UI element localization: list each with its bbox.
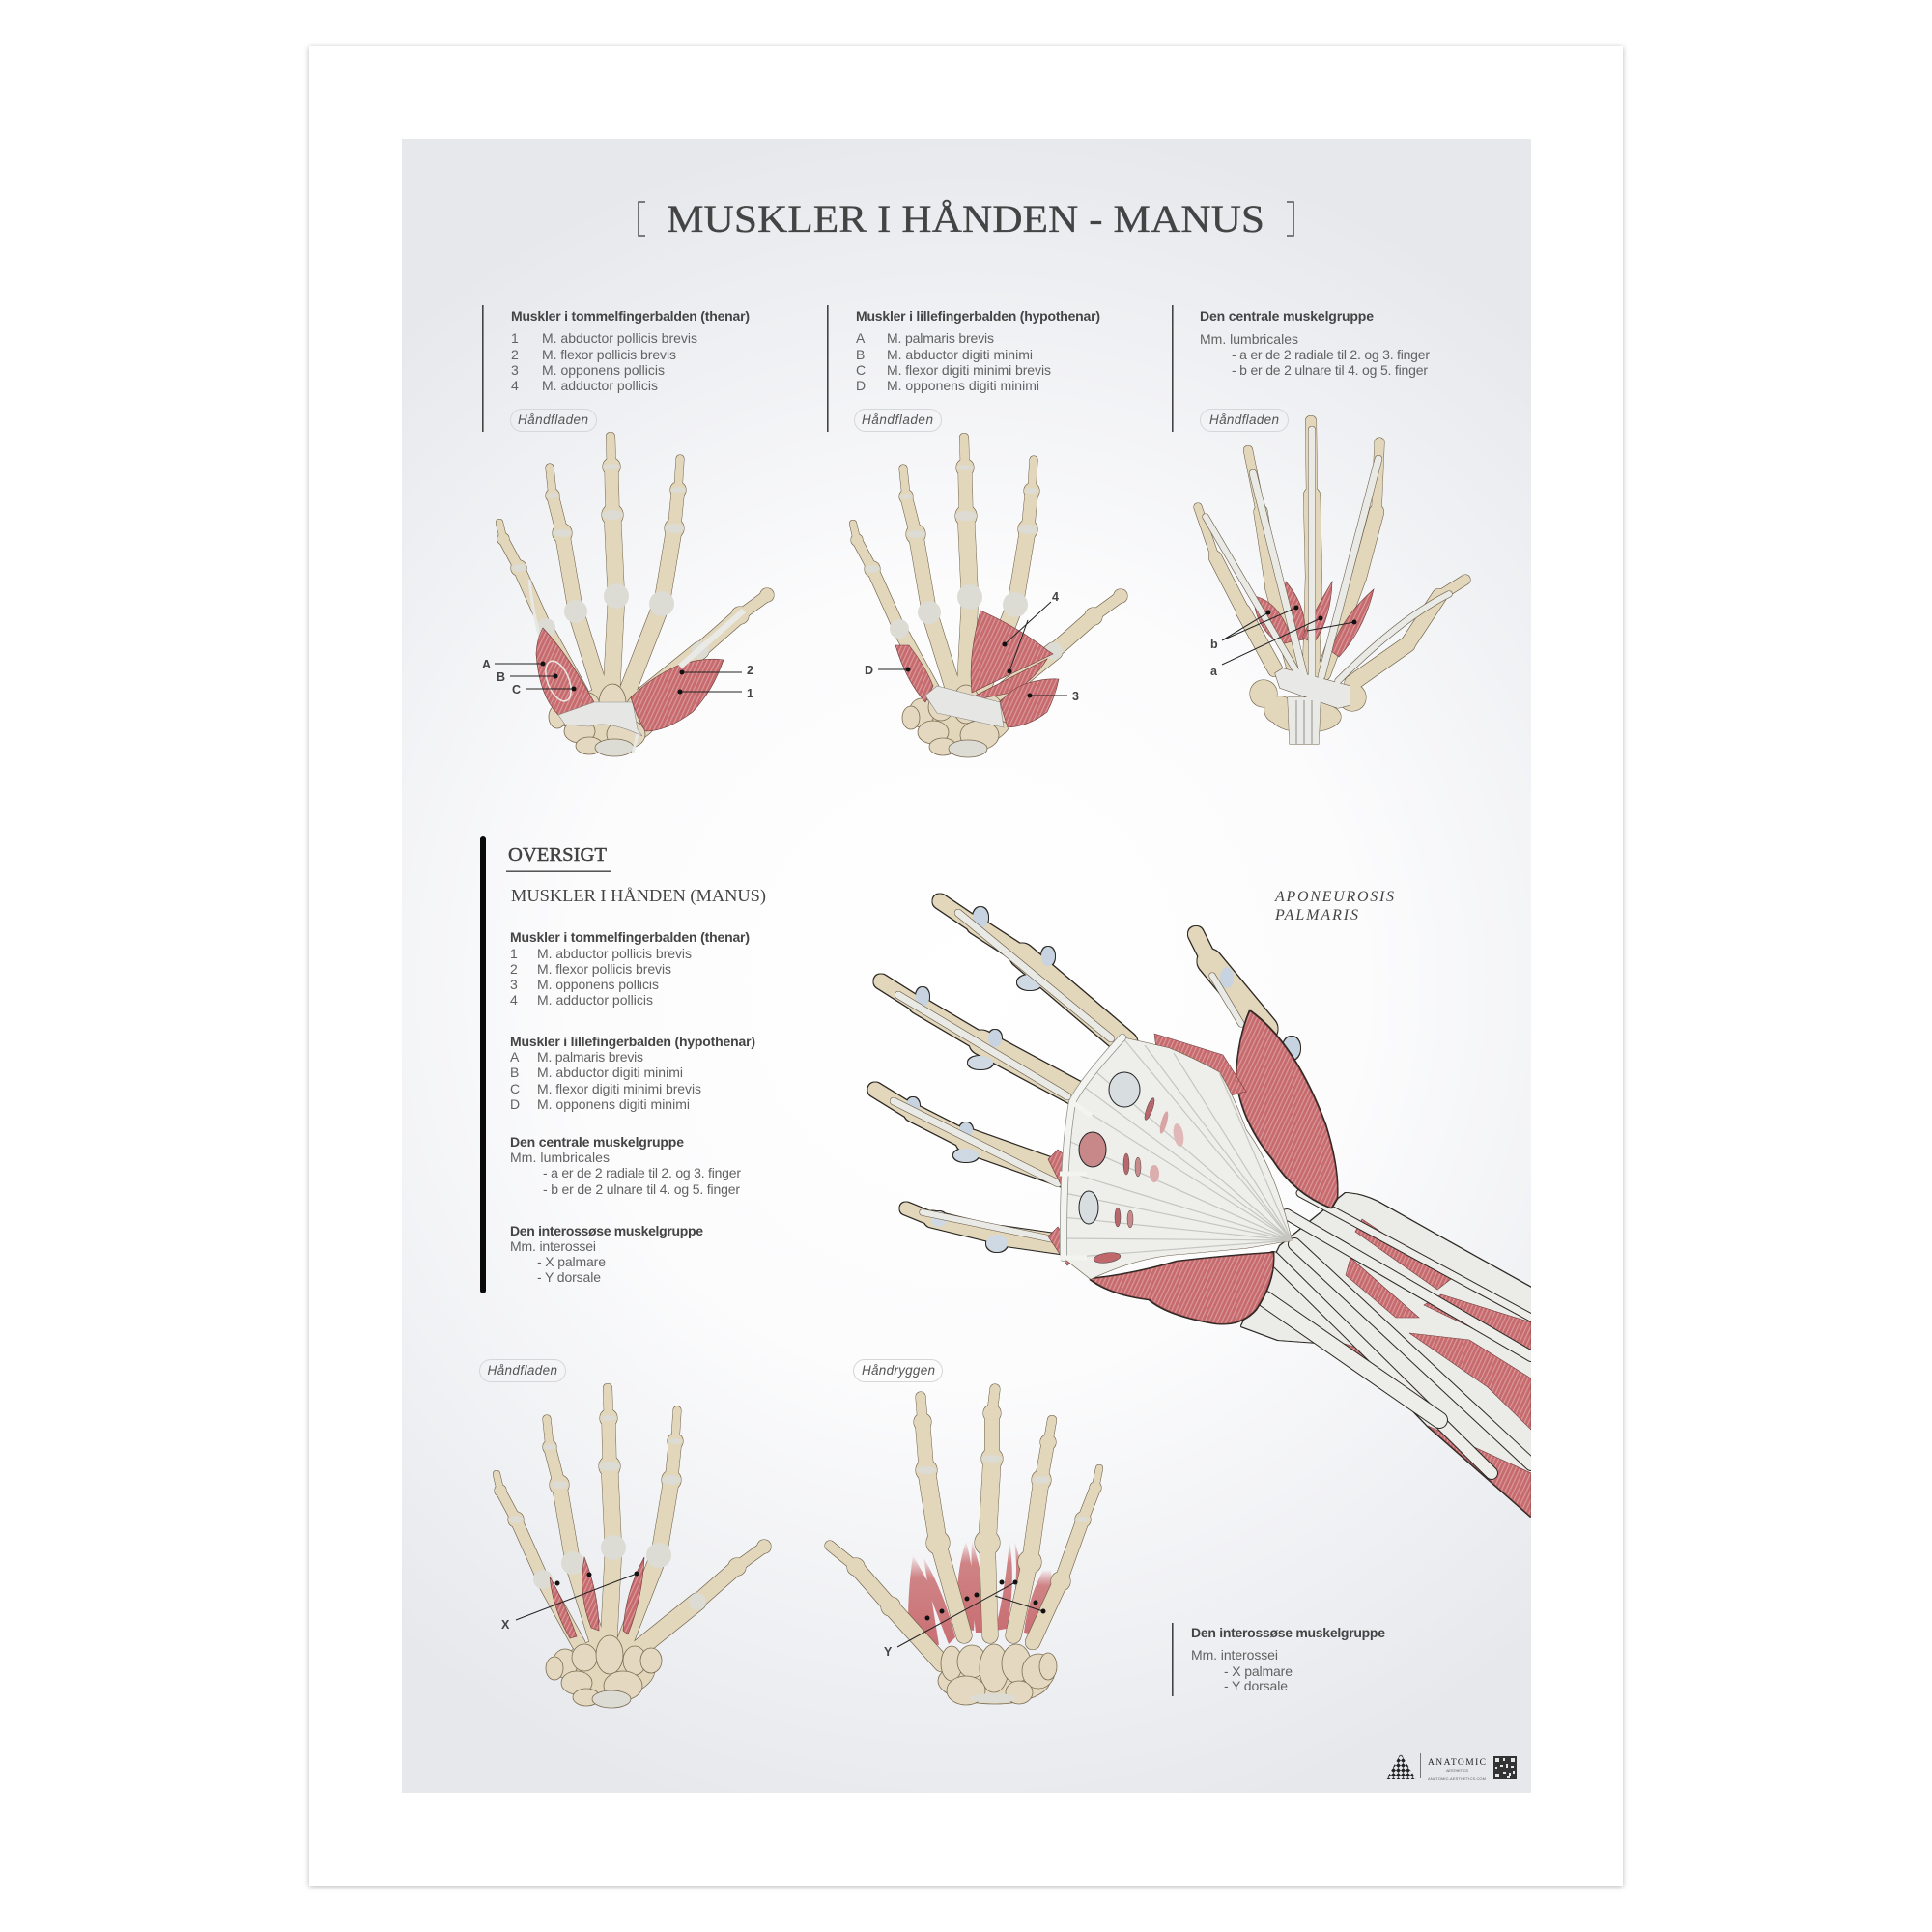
logo and QR code: ANATOMIC <box>1428 1758 1486 1768</box>
panel: overview legend: M. palmaris brevis <box>537 1049 643 1065</box>
panel: interosseous legend <box>1172 1623 1385 1696</box>
label: Håndryggen pill: Håndryggen <box>862 1363 935 1378</box>
panel: hypothenar legend: A <box>856 330 866 346</box>
panel: interosseous legend: - X palmare <box>1224 1663 1293 1679</box>
panel: hypothenar legend: M. opponens digiti minimi <box>887 378 1039 393</box>
forearm muscles <box>1326 1219 1531 1517</box>
panel: interosseous legend: - Y dorsale <box>1224 1678 1288 1693</box>
poster sheet <box>309 46 1623 1886</box>
thenar muscle <box>1236 1011 1337 1208</box>
tendons <box>1206 430 1449 744</box>
panel: central muscle group legend <box>1172 305 1430 432</box>
panel: central muscle group legend: Den centrale muskelgruppe <box>1200 308 1374 324</box>
heading: aponeurosis palmaris <box>1274 889 1394 923</box>
labels: B <box>497 670 505 684</box>
panel: overview legend: - b er de 2 ulnare til 4. og 5. finger <box>543 1181 740 1197</box>
panel: hypothenar legend <box>827 305 1100 432</box>
hand diagram: hypothenar muscles <box>851 438 1127 757</box>
logo and QR code <box>1386 1753 1517 1781</box>
label: Håndryggen pill <box>854 1360 943 1381</box>
labels: a <box>1210 665 1218 678</box>
muscle: opponens digiti minimi <box>895 645 933 702</box>
panel: hypothenar legend: C <box>856 362 866 378</box>
logo and QR code: ANATOMIC-AESTHETICS.COM <box>1428 1776 1486 1781</box>
muscle: thenar <box>631 659 724 731</box>
panel: thenar legend: M. abductor pollicis brevis <box>542 330 697 346</box>
ligament <box>925 686 1004 727</box>
panel: interosseous legend: Mm. interossei <box>1191 1647 1278 1662</box>
hand diagram: lumbricals with tendons <box>1198 421 1465 744</box>
panel: overview legend: M. opponens digiti minimi <box>537 1096 690 1112</box>
label: Håndfladen pill 1: Håndfladen <box>518 412 588 427</box>
panel: overview legend: D <box>510 1096 520 1112</box>
panel: central muscle group legend: Mm. lumbricales <box>1200 331 1298 347</box>
panel: thenar legend: 1 <box>511 330 519 346</box>
panel: overview legend: M. flexor pollicis brevis <box>537 961 671 977</box>
logo and QR code: AESTHETICS <box>1446 1768 1468 1773</box>
muscles <box>908 1541 1052 1645</box>
labels: A <box>482 658 491 671</box>
muscles <box>550 1577 577 1638</box>
panel: overview legend: 1 <box>510 946 518 961</box>
labels: b <box>1210 638 1218 651</box>
panel: thenar legend <box>482 305 750 432</box>
panel: overview legend: 4 <box>510 992 518 1008</box>
panel: overview legend: Den centrale muskelgruppe <box>510 1134 684 1150</box>
panel: overview legend: M. flexor digiti minimi brevis <box>537 1081 701 1096</box>
labels <box>884 1580 1045 1659</box>
panel: thenar legend: Muskler i tommelfingerbalden (thenar) <box>511 308 750 324</box>
title: MUSKLER I HÅNDEN - MANUS <box>667 197 1264 241</box>
labels <box>865 590 1079 703</box>
labels: 2 <box>747 664 753 677</box>
heading: aponeurosis palmaris: PALMARIS <box>1274 907 1358 923</box>
big illustration: palmar aponeurosis and forearm <box>875 901 1531 1517</box>
panel: hypothenar legend: D <box>856 378 866 393</box>
panel: central muscle group legend: - a er de 2 radiale til 2. og 3. finger <box>1232 347 1430 362</box>
palmar aponeurosis fan <box>1060 1037 1292 1279</box>
panel: overview legend: M. opponens pollicis <box>537 977 659 992</box>
muscle: opponens pollicis <box>1000 679 1059 727</box>
hypothenar muscle <box>1091 1253 1273 1323</box>
finger tendons <box>894 913 1241 1241</box>
panel: overview legend: M. adductor pollicis <box>537 992 653 1008</box>
panel: overview legend: OVERSIGT <box>508 844 607 866</box>
ligament <box>558 702 642 736</box>
lumbrical red patch <box>1154 1034 1246 1101</box>
labels <box>1210 605 1356 678</box>
panel: overview legend: Mm. interossei <box>510 1238 596 1254</box>
panel: overview legend: MUSKLER I HÅNDEN (MANUS) <box>511 886 766 906</box>
panel: overview legend: Muskler i lillefingerbalden (hypothenar) <box>510 1034 755 1049</box>
panel: thenar legend: M. flexor pollicis brevis <box>542 347 676 362</box>
panel: overview legend: Mm. lumbricales <box>510 1150 610 1165</box>
muscle: adductor pollicis <box>971 611 1053 693</box>
panel: thenar legend: 4 <box>511 378 519 393</box>
forearm base <box>1241 1193 1531 1517</box>
label: Håndfladen pill 1 <box>510 410 597 431</box>
labels: Y <box>884 1645 893 1659</box>
label: Håndfladen pill 3 <box>1200 410 1289 431</box>
panel: hypothenar legend: Muskler i lillefingerbalden (hypothenar) <box>856 308 1100 324</box>
background panel <box>402 139 1531 1793</box>
panel: hypothenar legend: M. palmaris brevis <box>887 330 994 346</box>
label: Håndfladen pill 2: Håndfladen <box>862 412 933 427</box>
panel: overview legend: - a er de 2 radiale til 2. og 3. finger <box>543 1165 741 1180</box>
muscles: lumbricals <box>1254 582 1374 657</box>
labels: 3 <box>1072 690 1079 703</box>
labels: C <box>512 683 521 696</box>
panel: hypothenar legend: M. flexor digiti minimi brevis <box>887 362 1051 378</box>
panel: thenar legend: 2 <box>511 347 519 362</box>
panel: central muscle group legend: - b er de 2 ulnare til 4. og 5. finger <box>1232 362 1428 378</box>
panel: overview legend: - X palmare <box>537 1254 606 1269</box>
hand diagram: palmar interossei <box>495 1388 771 1708</box>
panel: thenar legend: M. opponens pollicis <box>542 362 665 378</box>
forearm tendons <box>1265 1193 1531 1473</box>
hand diagram: dorsal interossei <box>830 1389 1101 1705</box>
panel: overview legend: 2 <box>510 961 518 977</box>
label: Håndfladen pill 2 <box>854 410 941 431</box>
label: Håndfladen pill 3: Håndfladen <box>1209 412 1279 427</box>
labels <box>501 1571 639 1632</box>
panel: overview legend <box>480 836 766 1293</box>
labels: 1 <box>747 687 753 700</box>
aponeurosis openings <box>1079 1072 1185 1264</box>
heading: aponeurosis palmaris: APONEUROSIS <box>1274 889 1394 905</box>
hand diagram: thenar muscles <box>482 437 774 756</box>
panel: overview legend: B <box>510 1065 519 1080</box>
labels: 4 <box>1052 590 1059 604</box>
panel: overview legend: C <box>510 1081 520 1096</box>
label: Håndfladen pill 4: Håndfladen <box>487 1363 557 1378</box>
muscle: hypothenar <box>536 628 594 715</box>
labels: X <box>501 1618 510 1632</box>
panel: overview legend: Den interossøse muskelgruppe <box>510 1223 703 1238</box>
panel: overview legend: M. abductor digiti minimi <box>537 1065 683 1080</box>
panel: overview legend: - Y dorsale <box>537 1269 601 1285</box>
panel: hypothenar legend: B <box>856 347 865 362</box>
panel: interosseous legend: Den interossøse muskelgruppe <box>1191 1625 1385 1640</box>
label: Håndfladen pill 4 <box>479 1360 566 1381</box>
panel: overview legend: A <box>510 1049 520 1065</box>
labels: D <box>865 664 873 677</box>
panel: hypothenar legend: M. abductor digiti minimi <box>887 347 1033 362</box>
panel: overview legend: M. abductor pollicis brevis <box>537 946 692 961</box>
labels <box>482 658 753 700</box>
panel: overview legend: Muskler i tommelfingerbalden (thenar) <box>510 929 750 945</box>
finger bones <box>875 901 1300 1252</box>
panel: overview legend: 3 <box>510 977 518 992</box>
panel: thenar legend: M. adductor pollicis <box>542 378 658 393</box>
panel: thenar legend: 3 <box>511 362 519 378</box>
